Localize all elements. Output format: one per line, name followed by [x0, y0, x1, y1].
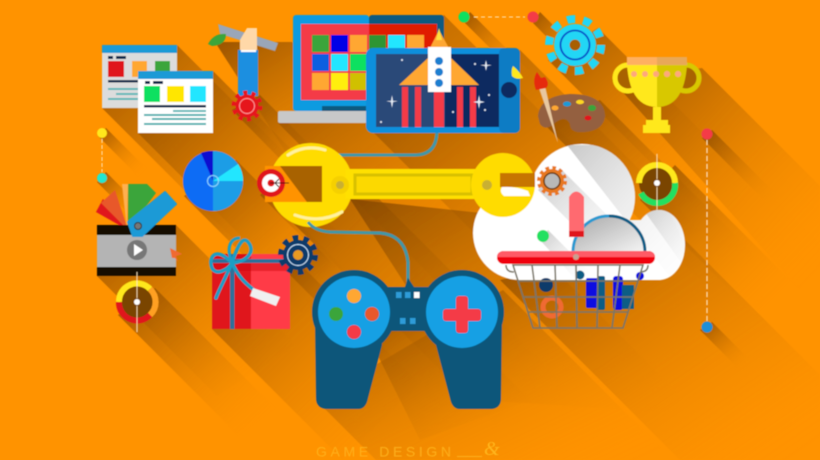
- icon: red gear: [234, 93, 260, 119]
- icon: colour swatch fan: [96, 184, 156, 230]
- browser windows: [102, 45, 213, 133]
- icon: cloud: [472, 143, 686, 281]
- front window: [138, 71, 213, 133]
- icon: hand holding scroll: [208, 24, 278, 96]
- stick: [569, 192, 584, 237]
- icon: trophy: [615, 57, 699, 133]
- back window: [102, 45, 177, 108]
- icon: paint palette and brush: [512, 66, 605, 143]
- dome: [573, 216, 645, 252]
- icon: target: [257, 169, 289, 197]
- icon: navy gear: [281, 238, 315, 272]
- controller buttons: [329, 289, 379, 339]
- controller d-pad: [443, 296, 481, 333]
- icon: yellow and cyan dots left: [97, 128, 107, 183]
- icon: tablet with rocket game: [366, 28, 520, 133]
- cable: tablet to wrench: [306, 130, 437, 203]
- title: &: [484, 438, 500, 460]
- basket rim: [497, 251, 655, 264]
- title: [316, 438, 500, 460]
- basket items: [539, 270, 644, 316]
- icon: cyan gear: [549, 19, 601, 71]
- cable: controller: [308, 222, 408, 282]
- pie chart: [183, 151, 243, 211]
- icon: wrench: [265, 143, 535, 227]
- connector dots: green and red: [458, 12, 538, 22]
- dashed line right with dots: [702, 128, 712, 332]
- icon: donut left: [119, 272, 156, 332]
- icon: video player: [97, 225, 182, 276]
- icon: blue swatch: [128, 192, 176, 236]
- icon: laptop: [278, 15, 444, 123]
- icon: game controller: [312, 270, 504, 409]
- icon: donut right: [639, 154, 675, 210]
- title: GAME DESIGN: [316, 444, 451, 460]
- icon: orange gear on cloud: [539, 168, 565, 194]
- icon: gift box: [211, 238, 290, 329]
- basket wire: [506, 265, 648, 328]
- icon: shopping basket: [497, 192, 655, 328]
